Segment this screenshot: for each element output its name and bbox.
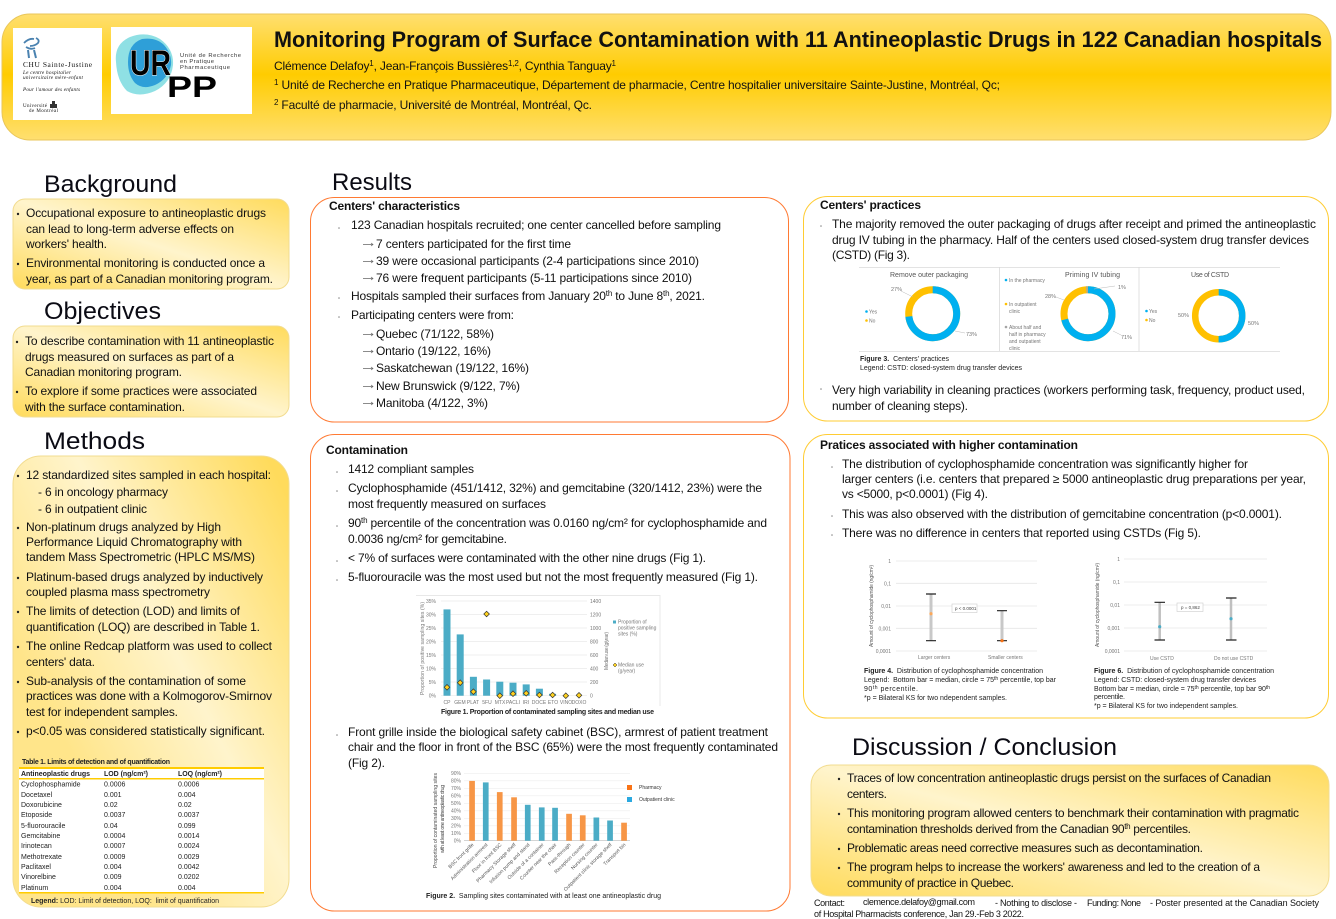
- table 1: LOQ (ng/cm²): [178, 771, 222, 778]
- chart: figure 5: 1: [1117, 557, 1120, 563]
- chart: figure 2: Nursing counter: [570, 842, 600, 871]
- caption: figure 5: *p = Bilateral KS for two independent samples.: [1094, 703, 1238, 710]
- chart: figure 2: Pharmacy Storage shelf: [475, 842, 518, 884]
- chart: figure 2: 10%: [451, 831, 462, 837]
- chart: figure 4: p < 0.0001: [955, 606, 977, 611]
- panel: Practices associated with higher contamination: vs <5000, p<0.0001) (Fig 4).: [842, 487, 988, 501]
- chart: figure 1: 200: [590, 680, 599, 686]
- chart: figure 1: 35%: [426, 599, 437, 605]
- panel: Centers' characteristics: New Brunswick (9/122, 7%): [376, 379, 520, 393]
- chart: figure 4: 0,1: [884, 582, 891, 588]
- caption: figure 5: Figure 6. Distribution of cyclophosphamide concentration: [1094, 668, 1274, 675]
- donut: remove outer packaging: Remove outer packaging: [890, 272, 968, 279]
- affiliation 1: 1: [274, 78, 279, 87]
- caption: figure 4: Figure 4. Distribution of cyclophosphamide concentration: [864, 668, 1043, 675]
- chart: figure 2: 0%: [454, 838, 462, 844]
- table 1: Table 1. Limits of detection and of quantification: [22, 759, 170, 766]
- chart: figure 2: 20%: [451, 824, 462, 830]
- chart: figure 1: positive sampling: [618, 626, 657, 632]
- panel: Practices associated with higher contamination: This was also observed with the distribution of gemcitabine concentration (p<0.0001).: [842, 507, 1282, 521]
- donut: use of CSTD: No: [1149, 318, 1156, 324]
- caption: figure 2: Figure 2. Sampling sites contaminated with at least one antineoplastic drug: [426, 893, 661, 900]
- panel: Centers' characteristics: th: [663, 289, 670, 298]
- table 1: 0.0037: [178, 812, 200, 819]
- donut: remove outer packaging: 73%: [966, 332, 977, 338]
- panel: Contamination: (Fig 2).: [348, 756, 385, 770]
- chart: figure 5: Amount of cyclophosphamide (ng/cm²): [1095, 563, 1101, 647]
- chart: figure 2: Floor in front BSC: [471, 842, 504, 875]
- caption: figure 4: 90: [864, 686, 872, 693]
- table 1: Legend: LOD: Limit of detection, LOQ: limit of quantification: [31, 898, 219, 905]
- chart: figure 1: 5FU: [482, 700, 492, 706]
- chart: figure 4: 0,01: [881, 604, 891, 610]
- chart: figure 5: 0,01: [1110, 603, 1120, 609]
- chart: figure 1: Median use: [618, 662, 644, 668]
- chart: figure 1: 600: [590, 653, 599, 659]
- panel: Centers' practices: Centers' practices: [820, 198, 921, 212]
- table 1: Platinum: [21, 885, 48, 892]
- chart: figure 2: 90%: [451, 771, 462, 777]
- chart: figure 2: Reception counter: [553, 842, 587, 875]
- panel: Centers' characteristics: Manitoba (4/122, 3%): [376, 396, 488, 410]
- chart: figure 5: [1095, 557, 1267, 662]
- table 1: 0.02: [104, 802, 118, 809]
- chart: figure 2: BSC front grille: [447, 842, 476, 870]
- panel: Methods: quantification (LOQ) are described in Table 1.: [26, 620, 260, 634]
- table 1: Methotrexate: [21, 854, 62, 861]
- panel: Methods: Platinum-based drugs analyzed by inductively: [26, 570, 263, 584]
- table 1: 0.0006: [178, 782, 200, 788]
- panel: Discussion / Conclusion: The program helps to increase the workers' awareness and led to the creation of a: [847, 860, 1260, 874]
- panel: Centers' characteristics: 76 were frequent participants (5-11 participations since 2010): [376, 271, 692, 285]
- table 1: Etoposide: [21, 812, 52, 819]
- caption: figure 3: Legend: CSTD: closed-system drug transfer devices: [860, 365, 1022, 372]
- panel: Objectives: To explore if some practices were associated: [25, 384, 257, 398]
- chart: figure 5: 0,001: [1107, 626, 1120, 632]
- chart: figure 1: 800: [590, 640, 599, 646]
- chart: figure 1: (g/year): [618, 668, 636, 674]
- panel: Methods: Sub-analysis of the contamination of some: [26, 674, 246, 688]
- authors: , Cynthia Tanguay: [519, 59, 612, 73]
- header banner: [2, 14, 1331, 140]
- table 1: [19, 759, 264, 905]
- chart: figure 4: 0,001: [878, 626, 891, 632]
- panel: Methods: centers' data.: [26, 655, 95, 669]
- title: Monitoring Program of Surface Contamination with 11 Antineoplastic Drugs in 122 Canadian hospitals: [274, 27, 1322, 52]
- caption: figure 1: Figure 1. Proportion of contaminated sampling sites and median use: [441, 709, 654, 716]
- donut: remove outer packaging: No: [869, 318, 876, 324]
- chart: figure 1: 0%: [429, 694, 437, 700]
- caption: figure 4: Legend: Bottom bar = median, circle = 75: [864, 677, 994, 684]
- panel: Centers' characteristics: to June 8: [612, 289, 664, 303]
- chart: figure 2: 30%: [451, 816, 462, 822]
- logo: CHU Sainte-Justine: Le centre hospitalier: [22, 70, 72, 76]
- panel: Centers' characteristics: Ontario (19/122, 16%): [376, 344, 491, 358]
- heading: Results: Results: [332, 169, 412, 196]
- chart: figure 1: 25%: [426, 626, 437, 632]
- caption: figure 4: th: [994, 676, 998, 682]
- panel: Contamination: [310, 434, 790, 911]
- panel: Contamination: Cyclophosphamide (451/1412, 32%) and gemcitabine (320/1412, 23%) were the: [348, 481, 762, 495]
- panel: Centers' practices: [804, 196, 1328, 421]
- panel: Methods: Performance Liquid Chromatography with: [26, 535, 242, 549]
- panel: Objectives: [13, 326, 289, 417]
- panel: Methods: tandem Mass Spectrometric (HPLC MS/MS): [26, 550, 255, 564]
- donut: priming IV tubing: About half and: [1009, 325, 1041, 331]
- donut: remove outer packaging: Yes: [869, 310, 878, 316]
- chart: figure 2: Pass-through: [547, 842, 573, 867]
- chart: figure 2: Outpatient clinic: [639, 797, 675, 803]
- panel: Background: Environmental monitoring is conducted once a: [26, 256, 265, 270]
- donut: use of CSTD: [1145, 272, 1259, 339]
- chart: figure 2: 80%: [451, 778, 462, 784]
- panel: Contamination: 5-fluorouracile was the most used but not the most frequently measured (Fig 1).: [348, 570, 758, 584]
- chart: figure 2: Outside of a container: [507, 842, 546, 881]
- panel: Background: can lead to long-term adverse effects on: [26, 222, 234, 236]
- caption: figure 5: Bottom bar = median, circle = 75: [1094, 686, 1195, 693]
- caption: figure 4: th: [873, 685, 878, 691]
- chart: figure 2: Counter near the chair: [519, 842, 559, 882]
- chart: figure 2: [433, 771, 675, 893]
- panel: Contamination: 90: [348, 516, 361, 530]
- chart: figure 1: PLAT: [467, 700, 479, 706]
- panel: Methods: practices was done with a Kolmogorov-Smirnov: [26, 689, 272, 703]
- panel: Methods: 12 standardized sites sampled in each hospital:: [26, 468, 271, 482]
- logo: CHU Sainte-Justine: [13, 28, 102, 120]
- table 1: 0.009: [104, 874, 122, 881]
- chart: figure 4: 0,0001: [876, 649, 891, 655]
- panel: Contamination: chair and the floor in front of the BSC (65%) were the most frequently contaminated: [348, 740, 778, 754]
- table 1: 0.001: [104, 792, 122, 799]
- caption: figure 4: [864, 668, 1057, 702]
- panel: Centers' practices: Very high variability in cleaning practices (workers performing task, frequency, product used,: [832, 383, 1305, 397]
- chart: figure 1: DOCE: [532, 700, 547, 706]
- panel: Centers' characteristics: [310, 198, 788, 422]
- chart: figure 4: 1: [888, 559, 891, 565]
- chart: figure 1: 1400: [590, 599, 601, 605]
- heading: Discussion / Conclusion: Discussion / Conclusion: [852, 734, 1117, 761]
- logo: URPP: Unité de Recherche: [180, 53, 241, 59]
- chart: figure 1: 1000: [590, 626, 601, 632]
- chart: figure 2: Outpatient clinic storage shelf: [563, 842, 614, 893]
- footer: contact and disclosure: Contact:: [814, 898, 845, 908]
- panel: Contamination: Front grille inside the biological safety cabinet (BSC), armrest of patient treatment: [348, 725, 769, 739]
- table 1: 0.02: [178, 802, 192, 809]
- chart: figure 2: 60%: [451, 794, 462, 800]
- panel: Discussion / Conclusion: [811, 765, 1329, 896]
- chart: figure 5: 0,1: [1113, 580, 1120, 586]
- donut: remove outer packaging: [865, 272, 977, 338]
- table 1: Paclitaxel: [21, 864, 51, 871]
- caption: figure 5: percentile, top bar 90: [1199, 686, 1266, 693]
- donut: priming IV tubing: 28%: [1045, 294, 1056, 300]
- table 1: LOD (ng/cm²): [104, 771, 148, 778]
- panel: Practices associated with higher contamination: The distribution of cyclophosphamide concentration was significantly higher for: [842, 457, 1248, 471]
- logo: URPP: Pharmaceutique: [180, 65, 230, 71]
- panel: Background: year, as part of a Canadian monitoring program.: [26, 272, 273, 286]
- panel: Centers' characteristics: Centers' characteristics: [329, 199, 460, 213]
- chart: figure 1: GEM: [454, 700, 466, 706]
- chart: figure 1: 10%: [426, 666, 437, 672]
- chart: figure 1: 15%: [426, 653, 437, 659]
- logo: URPP: PP: [167, 71, 217, 104]
- footer: contact and disclosure: of Hospital Pharmacists conference, Jan 29.-Feb 3 2022.: [814, 909, 1024, 919]
- caption: figure 4: *p = Bilateral KS for two ndependent samples.: [864, 695, 1007, 702]
- table 1: 0.0006: [104, 782, 126, 788]
- chart: figure 4: Amount of cyclophosphamide (ng/cm²): [869, 565, 875, 647]
- chart: figure 2: 70%: [451, 786, 462, 792]
- authors: 1: [612, 59, 617, 68]
- chart: figure 1: DOXO: [572, 700, 586, 706]
- chart: figure 1: 1200: [590, 612, 601, 618]
- panel: Centers' characteristics: Quebec (71/122, 58%): [376, 327, 494, 341]
- chart: figure 5: 0,0001: [1105, 649, 1120, 655]
- table 1: 0.004: [178, 792, 196, 799]
- chart: figure 1: ETO: [548, 700, 558, 706]
- chart: figure 1: CP: [444, 700, 451, 706]
- panel: Methods: The online Redcap platform was used to collect: [26, 639, 273, 653]
- panel: Discussion / Conclusion: percentiles.: [1130, 822, 1191, 836]
- panel: Methods: [13, 456, 289, 907]
- panel: Methods: test for independent samples.: [26, 705, 178, 719]
- chart: figure 1: IRI: [523, 700, 529, 706]
- chart: figure 1: PACLI: [506, 700, 520, 706]
- panel: Methods: - 6 in oncology pharmacy: [38, 485, 168, 499]
- caption: figure 4: percentile, top bar: [998, 677, 1057, 684]
- table 1: 0.0014: [178, 833, 200, 840]
- donut: priming IV tubing: [1005, 272, 1132, 352]
- table 1: 0.0029: [178, 854, 200, 861]
- chart: figure 4: [869, 559, 1037, 661]
- chart: figure 3 donuts: [859, 267, 1280, 352]
- donut: priming IV tubing: half in pharmacy: [1009, 332, 1046, 338]
- logo: CHU Sainte-Justine: de Montréal: [29, 109, 59, 114]
- table 1: Vinorelbine: [21, 874, 56, 881]
- footer: contact and disclosure: Funding: None: [1087, 898, 1141, 908]
- panel: Practices associated with higher contamination: Pratices associated with higher contamination: [820, 438, 1078, 452]
- footer: contact and disclosure: - Nothing to disclose -: [995, 898, 1077, 908]
- chart: figure 5: Do not use CSTD: [1214, 656, 1254, 662]
- panel: Methods: coupled plasma mass spectrometry: [26, 585, 210, 599]
- chart: figure 2: Infusion pump and stand: [488, 842, 532, 885]
- table 1: 0.004: [104, 864, 122, 871]
- table 1: 0.0004: [104, 833, 126, 840]
- chart: figure 2: 40%: [451, 808, 462, 814]
- table 1: 0.04: [104, 823, 118, 830]
- chart: figure 1: Median use (g/year): [604, 632, 610, 670]
- chart: figure 1: VINO: [560, 700, 572, 706]
- caption: figure 5: th: [1266, 685, 1270, 691]
- panel: Centers' characteristics: Participating centers were from:: [351, 308, 514, 322]
- logo: URPP: [111, 27, 252, 114]
- logo: URPP: UR: [130, 44, 171, 83]
- chart: figure 1: 400: [590, 666, 599, 672]
- donut: priming IV tubing: 71%: [1121, 335, 1132, 341]
- panel: Methods: The limits of detection (LOD) and limits of: [26, 604, 241, 618]
- chart: figure 4: Smaller centers: [988, 655, 1023, 661]
- authors: 1,2: [508, 59, 519, 68]
- chart: figure 1: Proportion of positive sampling sites (%): [420, 602, 426, 695]
- donut: priming IV tubing: and outpatient: [1009, 339, 1041, 345]
- table 1: Cyclophosphamide: [21, 782, 81, 788]
- panel: Practices associated with higher contamination: [804, 434, 1328, 718]
- table 1: Docetaxel: [21, 792, 53, 799]
- donut: priming IV tubing: 1%: [1118, 285, 1126, 291]
- chart: figure 1: 0: [590, 694, 593, 700]
- affiliation 2: 2: [274, 98, 279, 107]
- chart: figure 1: MTX: [495, 700, 506, 706]
- chart: figure 2: 50%: [451, 801, 462, 807]
- table 1: 0.004: [178, 885, 196, 892]
- donut: priming IV tubing: Priming IV tubing: [1065, 272, 1120, 279]
- panel: Contamination: th: [361, 516, 368, 525]
- chart: figure 2: Pharmacy: [639, 785, 662, 791]
- table 1: 5-fluorouracile: [21, 823, 65, 830]
- panel: Contamination: 0.0036 ng/cm² for gemcitabine.: [348, 532, 507, 546]
- panel: Objectives: Canadian monitoring program.: [25, 365, 182, 379]
- chart: figure 1: 20%: [426, 640, 437, 646]
- panel: Discussion / Conclusion: centers.: [847, 787, 887, 801]
- caption: figure 3: Figure 3. Centers' practices: [860, 356, 950, 363]
- table 1: 0.0007: [104, 843, 126, 850]
- panel: Centers' characteristics: Hospitals sampled their surfaces from January 20: [351, 289, 606, 303]
- table 1: Antineoplastic drugs: [21, 771, 90, 778]
- panel: Contamination: < 7% of surfaces were contaminated with the other nine drugs (Fig 1).: [348, 551, 706, 565]
- donut: priming IV tubing: In outpatient: [1009, 302, 1037, 308]
- authors: 1: [369, 59, 374, 68]
- donut: use of CSTD: Use of CSTD: [1191, 272, 1229, 279]
- panel: Centers' practices: drug IV tubing in the pharmacy. Half of the centers used closed-system drug transfer devices: [832, 233, 1309, 247]
- panel: Practices associated with higher contamination: larger centers (i.e. centers that prepared ≥ 5000 antineoplastic drug preparations per year,: [842, 472, 1306, 486]
- table 1: 0.0202: [178, 874, 200, 881]
- panel: Discussion / Conclusion: Traces of low concentration antineoplastic drugs persist on the surfaces of Canadian: [847, 771, 1271, 785]
- panel: Discussion / Conclusion: Problematic areas need corrective measures such as decontamination.: [847, 841, 1203, 855]
- caption: figure 5: [1094, 668, 1274, 710]
- footer: contact and disclosure: [814, 897, 1320, 919]
- chart: figure 1: 5%: [429, 680, 437, 686]
- table 1: 0.0042: [178, 864, 200, 871]
- panel: Centers' characteristics: Saskatchewan (19/122, 16%): [376, 361, 529, 375]
- panel: Methods: Non-platinum drugs analyzed by High: [26, 520, 221, 534]
- panel: Background: Occupational exposure to antineoplastic drugs: [26, 206, 266, 220]
- donut: priming IV tubing: clinic: [1009, 309, 1021, 315]
- panel: Centers' characteristics: 7 centers participated for the first time: [376, 237, 571, 251]
- caption: figure 3: [860, 356, 1022, 372]
- affiliation 1: Unité de Recherche en Pratique Pharmaceutique, Département de pharmacie, Centre hospitalier universitaire Sainte-Justine, Montréal, Qc;: [278, 78, 1000, 92]
- table 1: Doxorubicine: [21, 802, 62, 809]
- table 1: 0.0024: [178, 843, 200, 850]
- heading: Methods: Methods: [44, 428, 145, 455]
- panel: Centers' characteristics: , 2021.: [669, 289, 705, 303]
- logo: CHU Sainte-Justine: Université: [23, 104, 48, 109]
- panel: Contamination: 1412 compliant samples: [348, 462, 474, 476]
- panel: Contamination: Contamination: [326, 443, 408, 457]
- table 1: 0.004: [104, 885, 122, 892]
- caption: figure 5: percentile.: [1094, 694, 1125, 701]
- panel: Background: [13, 199, 289, 289]
- footer: contact and disclosure: clemence.delafoy@gmail.com: [863, 897, 975, 907]
- table 1: 0.0009: [104, 854, 126, 861]
- chart: figure 1: Proportion of: [618, 620, 647, 626]
- panel: Centers' practices: (CSTD) (Fig 3).: [832, 248, 910, 262]
- logo: CHU Sainte-Justine: CHU Sainte-Justine: [23, 60, 93, 69]
- donut: use of CSTD: 50%: [1248, 321, 1259, 327]
- panel: Background: workers' health.: [25, 237, 107, 251]
- panel: Centers' characteristics: 39 were occasional participants (2-4 participations since 2010): [376, 254, 699, 268]
- table 1: 0.0037: [104, 812, 126, 819]
- donut: priming IV tubing: In the pharmacy: [1009, 278, 1045, 284]
- logo: CHU Sainte-Justine: Pour l'amour des enfants: [22, 86, 80, 93]
- panel: Methods: p<0.05 was considered statistically significant.: [26, 724, 265, 738]
- caption: figure 5: th: [1194, 685, 1199, 691]
- panel: Discussion / Conclusion: th: [1124, 822, 1131, 831]
- chart: figure 2: Transport bin: [602, 842, 628, 867]
- panel: Discussion / Conclusion: community of practice in Quebec.: [847, 876, 1014, 890]
- panel: Centers' characteristics: th: [606, 289, 612, 298]
- chart: figure 1: 30%: [426, 612, 437, 618]
- donut: remove outer packaging: 27%: [891, 287, 902, 293]
- panel: Contamination: most frequently measured on surfaces: [348, 497, 546, 511]
- donut: priming IV tubing: clinic: [1009, 346, 1021, 352]
- panel: Discussion / Conclusion: This monitoring program allowed centers to benchmark their contamination with pragmatic: [847, 806, 1299, 820]
- caption: figure 5: Legend: CSTD: closed-system drug transfer devices: [1094, 677, 1256, 684]
- heading: Background: Background: [44, 171, 177, 198]
- panel: Objectives: drugs measured on surfaces as part of a: [25, 350, 234, 364]
- chart: figure 2: with at least one antineoplastic drug: [440, 785, 446, 853]
- panel: Centers' practices: number of cleaning steps).: [832, 399, 968, 413]
- panel: Objectives: To describe contamination with 11 antineoplastic: [25, 334, 274, 348]
- chart: figure 5: Use CSTD: [1150, 656, 1174, 662]
- authors: Clémence Delafoy: [274, 59, 369, 73]
- logo: CHU Sainte-Justine: universitaire mère-enfant: [23, 74, 84, 81]
- logo: URPP: en Pratique: [180, 59, 214, 65]
- chart: figure 2: Administration armrest: [450, 842, 490, 882]
- footer: contact and disclosure: - Poster presented at the Canadian Society: [1150, 898, 1320, 908]
- donut: use of CSTD: 50%: [1178, 313, 1189, 319]
- panel: Centers' characteristics: 123 Canadian hospitals recruited; one center cancelled before sampling: [351, 218, 721, 232]
- donut: use of CSTD: Yes: [1149, 309, 1158, 315]
- panel: Methods: - 6 in outpatient clinic: [38, 502, 147, 516]
- panel: Discussion / Conclusion: contamination thresholds derived from the Canadian 90: [847, 822, 1125, 836]
- table 1: 0.099: [178, 823, 196, 830]
- heading: Objectives: Objectives: [44, 298, 161, 325]
- panel: Objectives: with the surface contamination.: [24, 400, 185, 414]
- panel: Contamination: percentile of the concentration was 0.0160 ng/cm² for cyclophosphamide and: [367, 516, 767, 530]
- authors: , Jean-François Bussières: [374, 59, 508, 73]
- panel: Centers' practices: The majority removed the outer packaging of drugs after receipt and primed the antineoplastic: [832, 217, 1316, 231]
- chart: figure 5: p = 0,862: [1181, 605, 1200, 610]
- chart: figure 4: Larger centers: [918, 655, 951, 661]
- table 1: Irinotecan: [21, 843, 52, 850]
- table 1: Gemcitabine: [21, 833, 60, 840]
- affiliation 2: Faculté de pharmacie, Université de Montréal, Montréal, Qc.: [278, 98, 592, 112]
- chart: figure 1: sites (%): [618, 632, 638, 638]
- caption: figure 4: percentile.: [878, 686, 918, 693]
- panel: Practices associated with higher contamination: There was no difference in centers that reported using CSTDs (Fig 5).: [842, 526, 1201, 540]
- chart: figure 1: [416, 596, 660, 706]
- chart: figure 2: Proportion of contaminated sampling sites: [433, 772, 439, 868]
